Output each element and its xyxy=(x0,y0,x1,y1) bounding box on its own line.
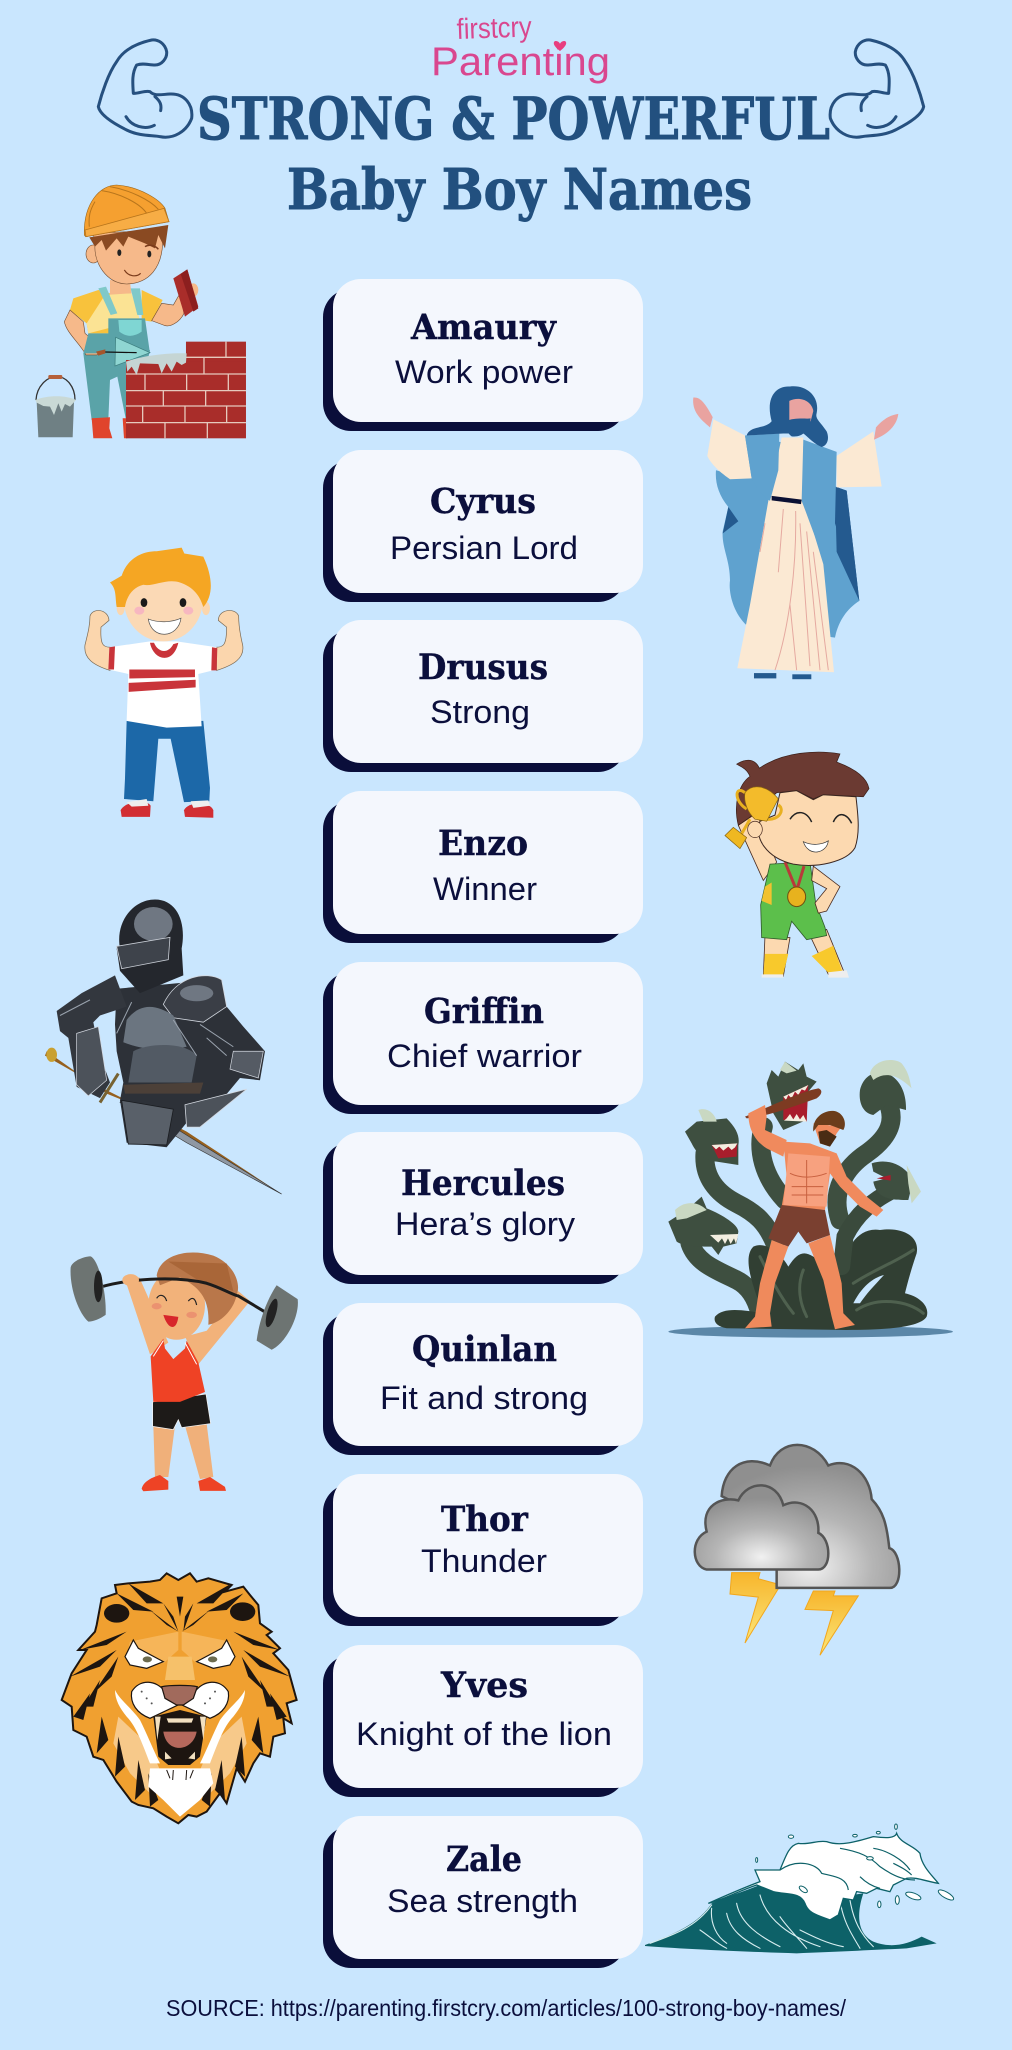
card: Quinlan: Fit and strong xyxy=(380,1380,588,1416)
card: Hercules: Hera’s glory xyxy=(395,1206,575,1242)
card: Amaury: Work power xyxy=(395,354,573,390)
logo: FirstCry Parenting: firstcry xyxy=(456,11,533,46)
icon: left flexed arm xyxy=(98,40,192,137)
source line: SOURCE: https://parenting.firstcry.com/articles/100-strong-boy-names/ xyxy=(166,1995,847,2021)
title: Baby Boy Names xyxy=(287,157,752,223)
card: Quinlan: Quinlan xyxy=(412,1329,557,1370)
card: Enzo: Enzo xyxy=(438,823,528,864)
card: Yves: Knight of the lion xyxy=(356,1716,612,1752)
illustration: weightlifting boy xyxy=(71,1253,298,1491)
card: Enzo xyxy=(323,791,643,943)
card: Thor xyxy=(323,1474,643,1626)
card: Amaury xyxy=(323,279,643,431)
card: Zale xyxy=(323,1816,643,1968)
card: Zale: Zale xyxy=(446,1839,522,1880)
card: Hercules: Hercules xyxy=(401,1163,565,1204)
illustration: hydra and hero xyxy=(668,1060,953,1338)
logo: FirstCry Parenting xyxy=(431,11,610,84)
illustration: storm clouds with lightning xyxy=(695,1445,899,1655)
icon: right flexed arm xyxy=(830,40,924,137)
illustration: winner boy with trophy xyxy=(725,752,869,978)
card: Yves xyxy=(323,1645,643,1797)
illustration: roaring lion head xyxy=(62,1573,297,1823)
title: STRONG & POWERFUL xyxy=(197,85,830,153)
card: Yves: Yves xyxy=(440,1665,528,1706)
card: Drusus: Strong xyxy=(430,694,530,730)
card: Thor: Thunder xyxy=(421,1543,547,1579)
card: Amaury: Amaury xyxy=(410,307,558,348)
card: Drusus: Drusus xyxy=(418,647,548,688)
card: Griffin: Griffin xyxy=(424,991,544,1032)
card: Cyrus: Cyrus xyxy=(430,481,536,522)
title xyxy=(197,85,830,223)
card: Hercules xyxy=(323,1132,643,1284)
logo: FirstCry Parenting: Parenting xyxy=(431,40,610,84)
card: Griffin: Chief warrior xyxy=(387,1038,582,1074)
card: Thor: Thor xyxy=(441,1499,529,1540)
card: Drusus xyxy=(323,620,643,772)
illustration: armored knight with sword xyxy=(45,899,282,1194)
illustration: bricklayer boy xyxy=(35,185,246,438)
illustration: boy flexing muscles xyxy=(85,548,243,818)
illustration: crashing ocean wave xyxy=(645,1824,955,1953)
card: Enzo: Winner xyxy=(433,871,537,907)
card: Quinlan xyxy=(323,1303,643,1455)
card: Cyrus: Persian Lord xyxy=(390,530,578,566)
illustration: robed bearded man xyxy=(693,386,898,679)
card: Zale: Sea strength xyxy=(387,1883,578,1919)
card: Griffin xyxy=(323,962,643,1114)
card: Cyrus xyxy=(323,450,643,602)
